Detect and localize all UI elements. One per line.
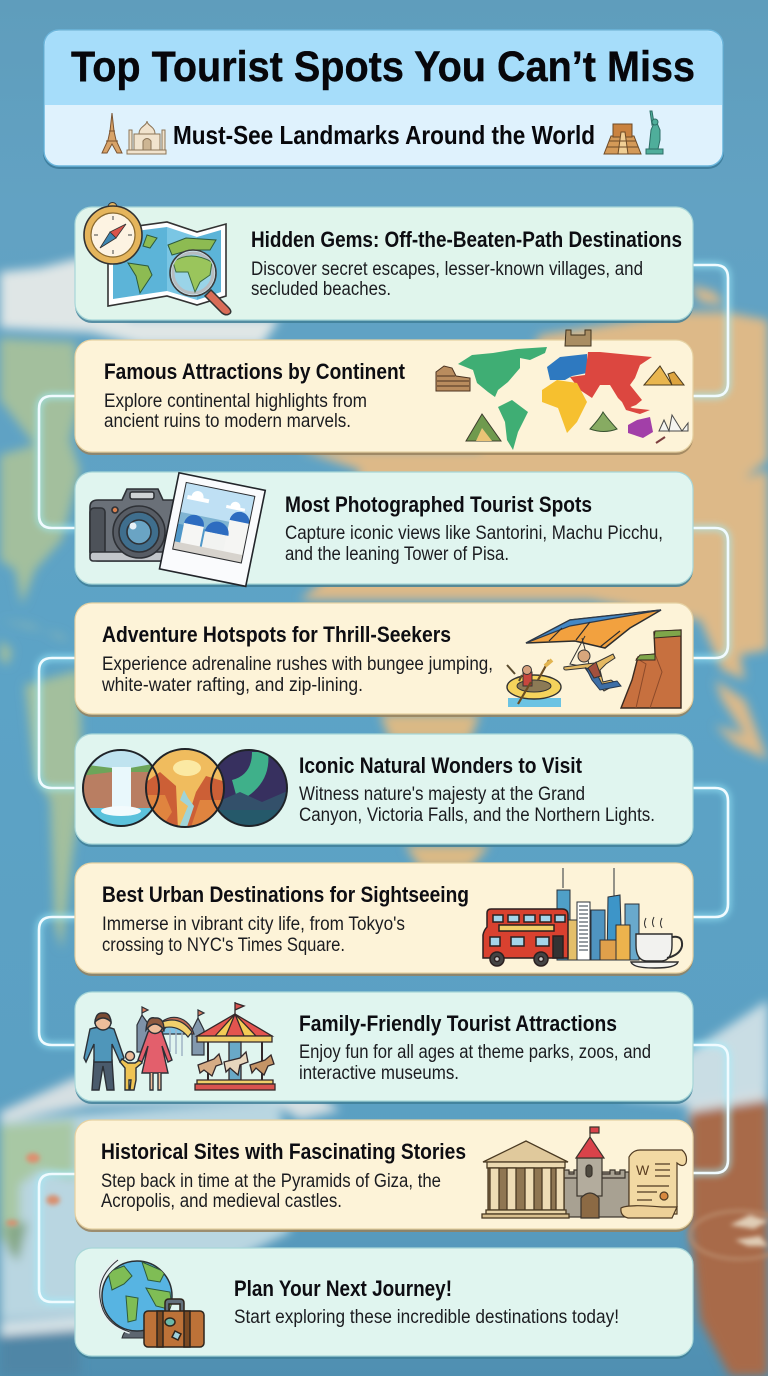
title: Top Tourist Spots You Can’t Miss bbox=[71, 43, 695, 91]
panel: adventure hotspots bbox=[75, 603, 693, 717]
description: Enjoy fun for all ages at theme parks, zoos, and bbox=[299, 1042, 651, 1063]
icon: castle bbox=[563, 1127, 629, 1218]
icon: theme park arch and towers bbox=[137, 1007, 204, 1056]
description: Explore continental highlights from bbox=[104, 391, 367, 412]
icon: aurora circle bbox=[218, 751, 286, 825]
description: Step back in time at the Pyramids of Giza, the bbox=[101, 1171, 441, 1192]
panel: plan your journey bbox=[75, 1248, 693, 1359]
icon: circle outlines bbox=[83, 749, 287, 827]
icon: Eiffel Tower bbox=[102, 113, 122, 153]
description: interactive museums. bbox=[299, 1063, 459, 1084]
icon: scroll with seal: W bbox=[636, 1162, 650, 1178]
icon: suitcase bbox=[144, 1299, 204, 1347]
heading: Plan Your Next Journey! bbox=[234, 1276, 452, 1301]
connector lines between cards bbox=[39, 265, 728, 1302]
description: Capture iconic views like Santorini, Machu Picchu, bbox=[285, 523, 663, 544]
icon: carousel bbox=[195, 1002, 275, 1090]
header panel bbox=[43, 30, 724, 169]
panel: urban destinations bbox=[75, 863, 693, 976]
icon: Statue of Liberty bbox=[646, 111, 663, 154]
icon: globe bbox=[100, 1260, 172, 1338]
icon: hang glider, raft and cliff bbox=[507, 610, 681, 708]
description: Immerse in vibrant city life, from Tokyo's bbox=[102, 914, 405, 935]
panel: famous attractions bbox=[75, 330, 693, 455]
icon: family bbox=[84, 1013, 172, 1090]
description: Discover secret escapes, lesser-known villages, and bbox=[251, 259, 643, 280]
icon: coffee cup bbox=[631, 917, 682, 968]
heading: Famous Attractions by Continent bbox=[104, 359, 406, 384]
description: Experience adrenaline rushes with bungee jumping, bbox=[102, 654, 493, 675]
description: Witness nature's majesty at the Grand bbox=[299, 784, 585, 805]
heading: Historical Sites with Fascinating Stories bbox=[101, 1139, 466, 1164]
description: white-water rafting, and zip-lining. bbox=[101, 675, 363, 696]
heading: Hidden Gems: Off-the-Beaten-Path Destinations bbox=[251, 227, 682, 252]
icon: scroll with seal bbox=[621, 1150, 686, 1218]
icon: map, compass and magnifier bbox=[84, 202, 231, 315]
panel: family friendly bbox=[75, 992, 693, 1104]
icon: city skyline bbox=[557, 868, 639, 960]
icon: Taj Mahal bbox=[127, 121, 166, 154]
icon: camera bbox=[90, 489, 178, 561]
description: secluded beaches. bbox=[251, 279, 391, 300]
icon: polaroid photo bbox=[159, 473, 265, 586]
heading: Family-Friendly Tourist Attractions bbox=[299, 1011, 617, 1036]
description: Acropolis, and medieval castles. bbox=[101, 1191, 342, 1212]
description: Canyon, Victoria Falls, and the Northern Lights. bbox=[299, 805, 655, 826]
icon: red double-decker bus bbox=[483, 909, 568, 966]
description: and the leaning Tower of Pisa. bbox=[285, 544, 509, 565]
description: ancient ruins to modern marvels. bbox=[104, 411, 351, 432]
icon: colourful world map with landmarks bbox=[436, 330, 688, 450]
heading: Best Urban Destinations for Sightseeing bbox=[102, 882, 469, 907]
subtitle: Must-See Landmarks Around the World bbox=[173, 120, 595, 150]
icon: Chichen Itza pyramid bbox=[604, 124, 641, 154]
icon: canyon circle bbox=[147, 750, 223, 826]
panel: natural wonders bbox=[75, 734, 693, 847]
heading: Most Photographed Tourist Spots bbox=[285, 492, 592, 517]
icon: greek temple bbox=[482, 1141, 569, 1218]
heading: Iconic Natural Wonders to Visit bbox=[299, 753, 583, 778]
panel: historical sites bbox=[75, 1120, 693, 1232]
description: crossing to NYC's Times Square. bbox=[102, 935, 345, 956]
heading: Adventure Hotspots for Thrill-Seekers bbox=[102, 622, 451, 647]
panel: hidden gems bbox=[75, 202, 693, 323]
description: Start exploring these incredible destinations today! bbox=[234, 1307, 619, 1328]
icon: waterfall circle bbox=[84, 751, 152, 825]
panel: most photographed bbox=[75, 472, 693, 587]
